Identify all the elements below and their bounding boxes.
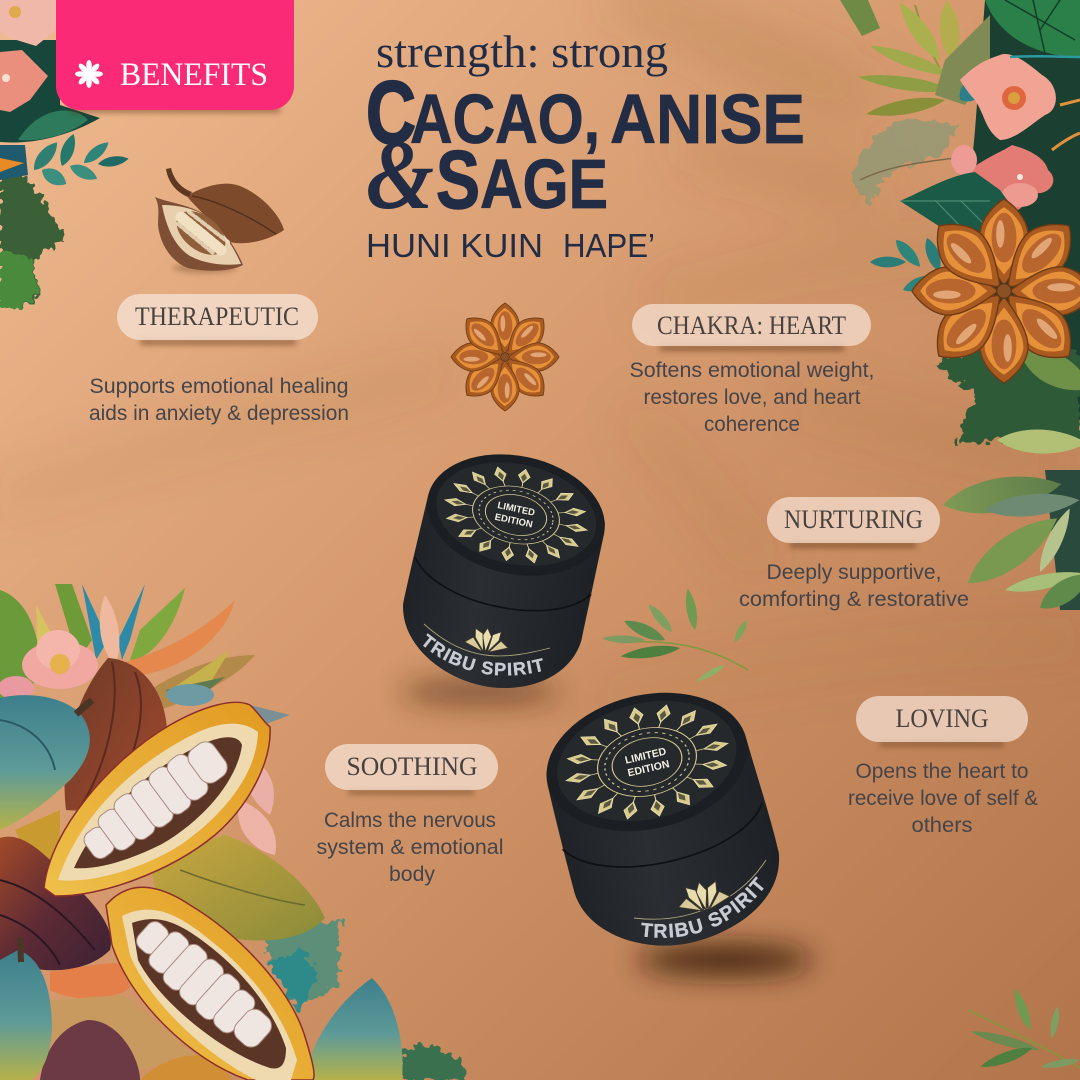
top small leaves xyxy=(840,0,880,36)
label: nurturing xyxy=(767,497,940,548)
brand logo xyxy=(674,876,732,916)
title block xyxy=(366,26,805,264)
pink flowers xyxy=(951,54,1080,212)
main title line 1: C xyxy=(366,62,416,162)
can shadow 1 xyxy=(400,680,560,704)
text: chakra description: coherence xyxy=(704,413,800,436)
text: therapeutic description: aids in anxiety & depression xyxy=(89,402,349,425)
yellow pod bottom xyxy=(140,1055,232,1080)
teal pod right xyxy=(305,978,403,1080)
label: chakra heart xyxy=(632,304,871,351)
olive pod xyxy=(152,835,325,940)
text: soothing description: body xyxy=(389,863,435,886)
subtitle: HUNI KUIN xyxy=(366,227,543,264)
product jar 2: EDITION xyxy=(626,758,671,779)
subtitle xyxy=(366,227,655,264)
text: therapeutic description xyxy=(89,375,349,425)
moss below star xyxy=(932,345,1080,445)
label: therapeutic: THERAPEUTIC xyxy=(135,302,299,331)
subtitle: HAPE’ xyxy=(563,227,655,264)
teal pod lower xyxy=(0,937,52,1080)
red pod xyxy=(65,658,167,810)
main title line 2 xyxy=(366,119,608,230)
dark leaf xyxy=(900,172,1025,240)
label: soothing: SOOTHING xyxy=(346,752,478,781)
text: nurturing description: comforting & restorative xyxy=(739,588,969,611)
main title line 2: & xyxy=(366,119,434,230)
text: chakra description: restores love, and heart xyxy=(644,386,861,409)
icon: star anise large xyxy=(912,199,1080,383)
icon: sage bottom right xyxy=(968,987,1080,1072)
main title line 1 xyxy=(366,62,805,162)
dark jungle backdrop xyxy=(955,0,1080,420)
cacao pods and flowers cluster xyxy=(0,584,403,1080)
text: soothing description: system & emotional xyxy=(316,836,504,859)
open pod upper xyxy=(44,702,270,896)
bottom foliage scrap xyxy=(402,1044,468,1080)
text: chakra description: Softens emotional weight, xyxy=(630,359,874,382)
icon: cacao pod xyxy=(155,168,284,273)
teal pod upper xyxy=(0,695,92,830)
badge label: BENEFITS xyxy=(120,57,268,93)
main title line 1: ACAO, xyxy=(410,80,600,158)
product jar 2: LIMITED xyxy=(624,745,668,767)
big green leaves xyxy=(985,0,1080,58)
brand name: TRIBU SPIRIT xyxy=(423,633,543,676)
main title line 2: AGE xyxy=(480,145,608,223)
text: soothing description: Calms the nervous xyxy=(324,809,496,832)
brand name: TRIBU SPIRIT xyxy=(641,876,764,938)
product jar 1: LIMITED xyxy=(496,500,536,519)
sage leaves xyxy=(940,338,1080,617)
orange pod xyxy=(50,963,130,999)
icon: pink flowers xyxy=(0,0,56,112)
text: nurturing description xyxy=(739,561,969,611)
text: loving description xyxy=(848,760,1038,837)
top-left foliage xyxy=(0,0,129,310)
palm leaf shadow xyxy=(0,0,1080,700)
label: nurturing: NURTURING xyxy=(784,505,923,534)
text: loving description: others xyxy=(912,814,972,837)
icon: flower asterisk xyxy=(75,60,103,88)
icon: sage sprig xyxy=(602,588,750,684)
orange streaks xyxy=(1052,100,1080,150)
teal sprig xyxy=(0,132,129,190)
label: soothing xyxy=(325,744,498,795)
can shadow 2 xyxy=(637,945,813,975)
text: soothing description xyxy=(316,809,504,886)
pink lily xyxy=(0,630,98,700)
main title line 2: S xyxy=(436,133,480,226)
tropical leaves xyxy=(0,584,340,1012)
purple pod xyxy=(0,837,111,970)
main title line 1: ANISE xyxy=(610,80,805,158)
yellow pod back xyxy=(15,810,60,890)
product jar 2 xyxy=(546,692,780,946)
moss xyxy=(0,175,66,310)
strength line: strength: strong xyxy=(376,26,668,77)
label: loving: LOVING xyxy=(896,704,988,733)
brand logo xyxy=(464,625,510,655)
product jar 1: EDITION xyxy=(494,512,534,531)
seeds xyxy=(75,734,235,870)
dark leaf mass xyxy=(0,40,100,143)
text: loving description: receive love of self & xyxy=(848,787,1038,810)
tan pod xyxy=(50,995,195,1070)
text: nurturing description: Deeply supportive, xyxy=(766,561,942,584)
text: loving description: Opens the heart to xyxy=(856,760,1028,783)
maroon pod xyxy=(40,1020,140,1080)
text: chakra description xyxy=(630,359,874,436)
product jar 1 xyxy=(403,454,605,688)
benefits badge xyxy=(56,0,294,113)
text: therapeutic description: Supports emotional healing xyxy=(90,375,348,398)
label: loving xyxy=(856,696,1028,747)
label: chakra heart: CHAKRA: HEART xyxy=(657,311,846,340)
open pod lower xyxy=(106,887,314,1080)
right foliage xyxy=(840,0,1080,617)
label: therapeutic xyxy=(117,294,318,345)
seeds xyxy=(127,911,281,1057)
fern and moss xyxy=(851,0,990,205)
icon: star anise small xyxy=(451,303,559,411)
